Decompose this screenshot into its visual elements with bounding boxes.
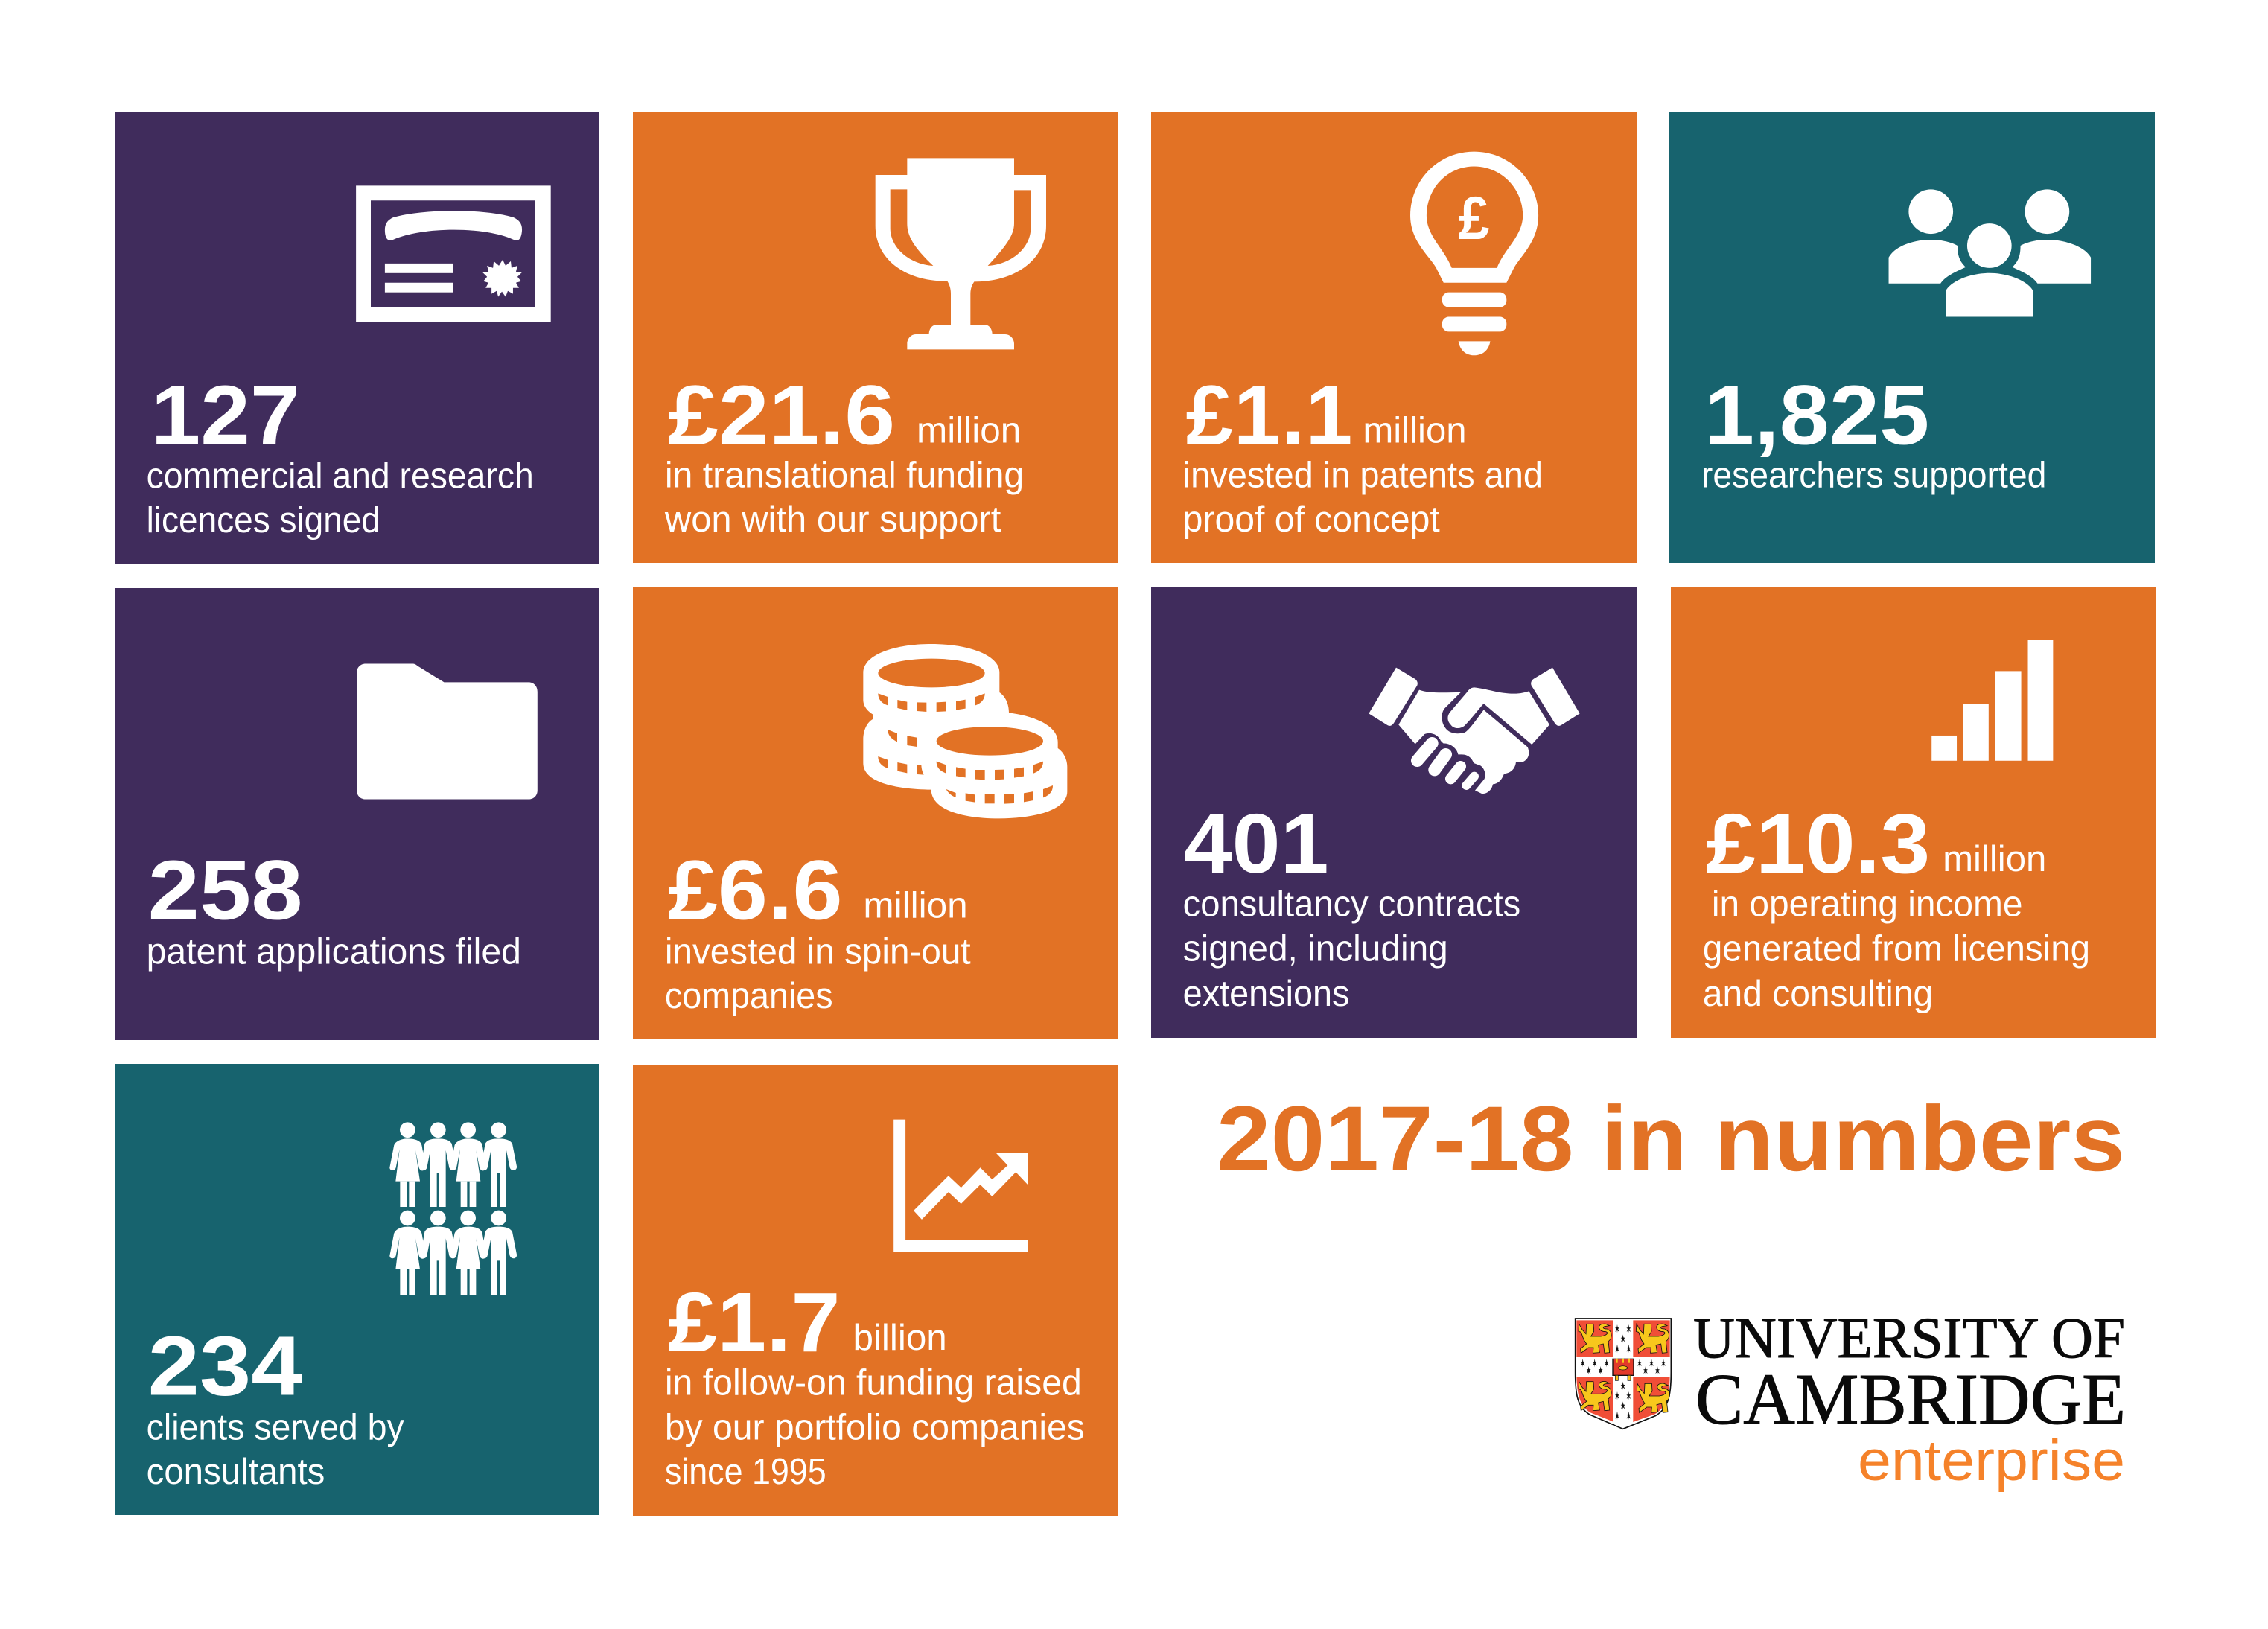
text: follow-on funding description: in follow-on funding raised — [665, 1363, 1082, 1403]
panel: patent applications — [115, 588, 599, 1040]
icon: handshake — [1369, 668, 1580, 794]
wordmark: University of Cambridge — [1693, 1305, 2126, 1440]
wordmark: University of Cambridge: UNIVERSITY OF — [1693, 1305, 2125, 1370]
figure: £10.3 million: million — [1943, 839, 2046, 879]
icon: university crest — [1576, 1319, 1671, 1429]
text: clients description: consultants — [147, 1452, 325, 1492]
panel: licences — [115, 112, 599, 564]
panel: researchers — [1669, 112, 2155, 563]
figure: 127: 127 — [151, 369, 300, 463]
figure: £21.6 million: million — [917, 411, 1021, 451]
figure: £10.3 million: £10.3 — [1706, 797, 1930, 891]
icon: light bulb with pound sign — [1410, 152, 1538, 355]
figure: £6.6 million — [668, 844, 968, 938]
text: operating income description: in operating income — [1712, 884, 2023, 925]
text: follow-on funding description: since 1995 — [665, 1452, 826, 1492]
text: spin-out description: companies — [665, 976, 833, 1016]
icon: rising bar chart — [1931, 640, 2053, 761]
text: researchers description: researchers supported — [1701, 455, 2046, 495]
text: operating income description: generated from licensing — [1703, 928, 2090, 969]
figure: £1.7 billion: £1.7 — [668, 1275, 841, 1370]
figure: £21.6 million — [668, 369, 1021, 463]
panel: consultancy contracts — [1151, 587, 1637, 1038]
figure: £21.6 million: £21.6 — [668, 369, 895, 463]
icon: two rows of people — [389, 1122, 517, 1295]
icon: stacked coins — [863, 644, 1067, 818]
text: consultancy description: signed, including — [1183, 928, 1448, 969]
text: patents description: proof of concept — [1183, 500, 1440, 540]
text: clients description: clients served by — [147, 1407, 404, 1447]
text: spin-out description — [665, 931, 971, 1016]
text: consultancy description — [1183, 884, 1520, 1014]
figure: £1.1 million — [1186, 369, 1467, 463]
figure: 234: 234 — [148, 1319, 302, 1414]
text: translational funding description: won with our support — [664, 500, 1001, 540]
text: follow-on funding description — [665, 1363, 1085, 1492]
figure: £1.1 million: £1.1 — [1186, 369, 1352, 463]
panel: follow-on funding — [633, 1065, 1118, 1516]
text: patent applications description: patent applications filed — [147, 931, 521, 972]
title: 2017-18 in numbers — [1217, 1088, 2125, 1190]
figure: 1,825: 1,825 — [1704, 369, 1929, 463]
text: consultancy description: consultancy contracts — [1183, 884, 1520, 925]
figure: £1.7 billion: billion — [853, 1318, 947, 1358]
text: patents description — [1183, 455, 1543, 540]
figure: £10.3 million — [1706, 797, 2046, 891]
wordmark: enterprise: enterprise — [1858, 1429, 2125, 1493]
panel: patents and proof of concept — [1151, 112, 1637, 563]
figure: £1.7 billion — [668, 1275, 947, 1370]
icon: trophy — [876, 158, 1046, 349]
icon: light bulb with pound sign: £ — [1459, 185, 1489, 252]
icon: certificate — [356, 185, 551, 322]
panel: translational funding — [633, 112, 1118, 563]
text: licences description: commercial and research — [147, 456, 534, 496]
panel: operating income — [1671, 587, 2156, 1038]
icon: folder — [357, 663, 538, 800]
text: consultancy description: extensions — [1183, 974, 1349, 1014]
figure: £6.6 million: million — [863, 886, 968, 926]
text: patents description: invested in patents and — [1183, 455, 1543, 495]
text: clients description — [147, 1407, 404, 1492]
text: translational funding description — [664, 455, 1024, 540]
icon: line chart with arrow — [893, 1120, 1028, 1252]
text: licences description — [147, 456, 534, 541]
text: licences description: licences signed — [147, 500, 380, 541]
text: operating income description — [1703, 884, 2090, 1014]
panel: clients — [115, 1064, 599, 1515]
text: spin-out description: invested in spin-out — [665, 931, 971, 972]
wordmark: University of Cambridge: CAMBRIDGE — [1695, 1359, 2126, 1440]
figure: 401: 401 — [1184, 797, 1329, 891]
figure: £1.1 million: million — [1363, 411, 1467, 451]
figure: 258: 258 — [148, 844, 302, 938]
logo: University of Cambridge Enterprise — [1576, 1305, 2126, 1493]
text: follow-on funding description: by our portfolio companies — [665, 1407, 1085, 1447]
icon: three people — [1889, 189, 2091, 317]
panel: spin-out investment — [633, 587, 1118, 1039]
text: operating income description: and consulting — [1703, 974, 1933, 1014]
figure: £6.6 million: £6.6 — [668, 844, 843, 938]
text: translational funding description: in translational funding — [665, 455, 1024, 495]
